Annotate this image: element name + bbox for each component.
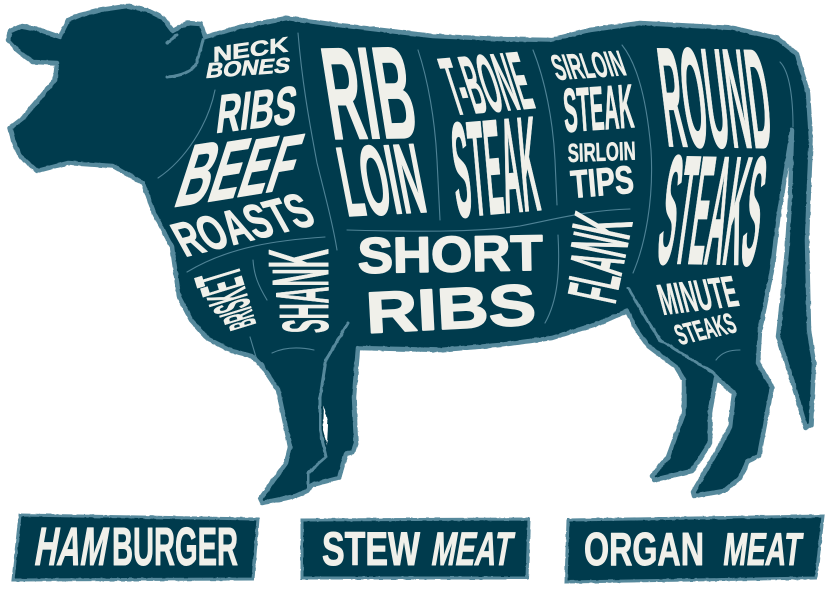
text: LOIN — [330, 124, 433, 238]
label: rib loin — [313, 19, 433, 238]
label: minute steaks — [653, 268, 743, 351]
text: RIB — [313, 19, 424, 167]
label: sirloin tips — [567, 136, 636, 207]
text: STEAK — [561, 72, 636, 146]
label: sirloin tips: TIPS — [569, 159, 636, 207]
label: ribs: RIBS — [214, 75, 300, 145]
label: round steaks — [650, 19, 779, 298]
box: stew meat: STEW — [322, 522, 420, 575]
box: organ meat: ORGAN — [584, 523, 704, 575]
label: neck bones: BONES — [204, 53, 292, 83]
label: brisket: BRISKET — [180, 261, 269, 342]
box: organ meat — [566, 516, 823, 582]
label: short ribs — [357, 225, 543, 346]
label: flank: FLANK — [541, 206, 650, 309]
label: sirloin steak: SIRLOIN — [546, 43, 630, 88]
label: neck bones: NECK — [213, 33, 289, 67]
label: shank: SHANK — [252, 249, 347, 333]
label: short ribs: SHORT — [357, 225, 543, 284]
label: beef roasts: BEEF — [166, 108, 315, 226]
label: beef roasts: ROASTS — [162, 183, 323, 267]
box: hamburger — [13, 515, 258, 580]
label: neck bones — [204, 33, 292, 83]
label: sirloin tips: SIRLOIN — [567, 136, 636, 168]
cut section divider lines — [158, 33, 793, 360]
box: stew meat: MEAT — [428, 523, 517, 576]
label: short ribs: RIBS — [364, 272, 537, 346]
box: hamburger: HAM — [31, 516, 114, 577]
box: stew meat — [302, 519, 529, 578]
label: minute steaks: STEAKS — [670, 308, 741, 351]
label: beef roasts — [162, 108, 323, 267]
label: sirloin steak — [546, 43, 636, 146]
box: hamburger: BURGER — [112, 517, 238, 577]
text: T-BONE — [431, 35, 542, 132]
label: t-bone steak — [431, 35, 544, 246]
